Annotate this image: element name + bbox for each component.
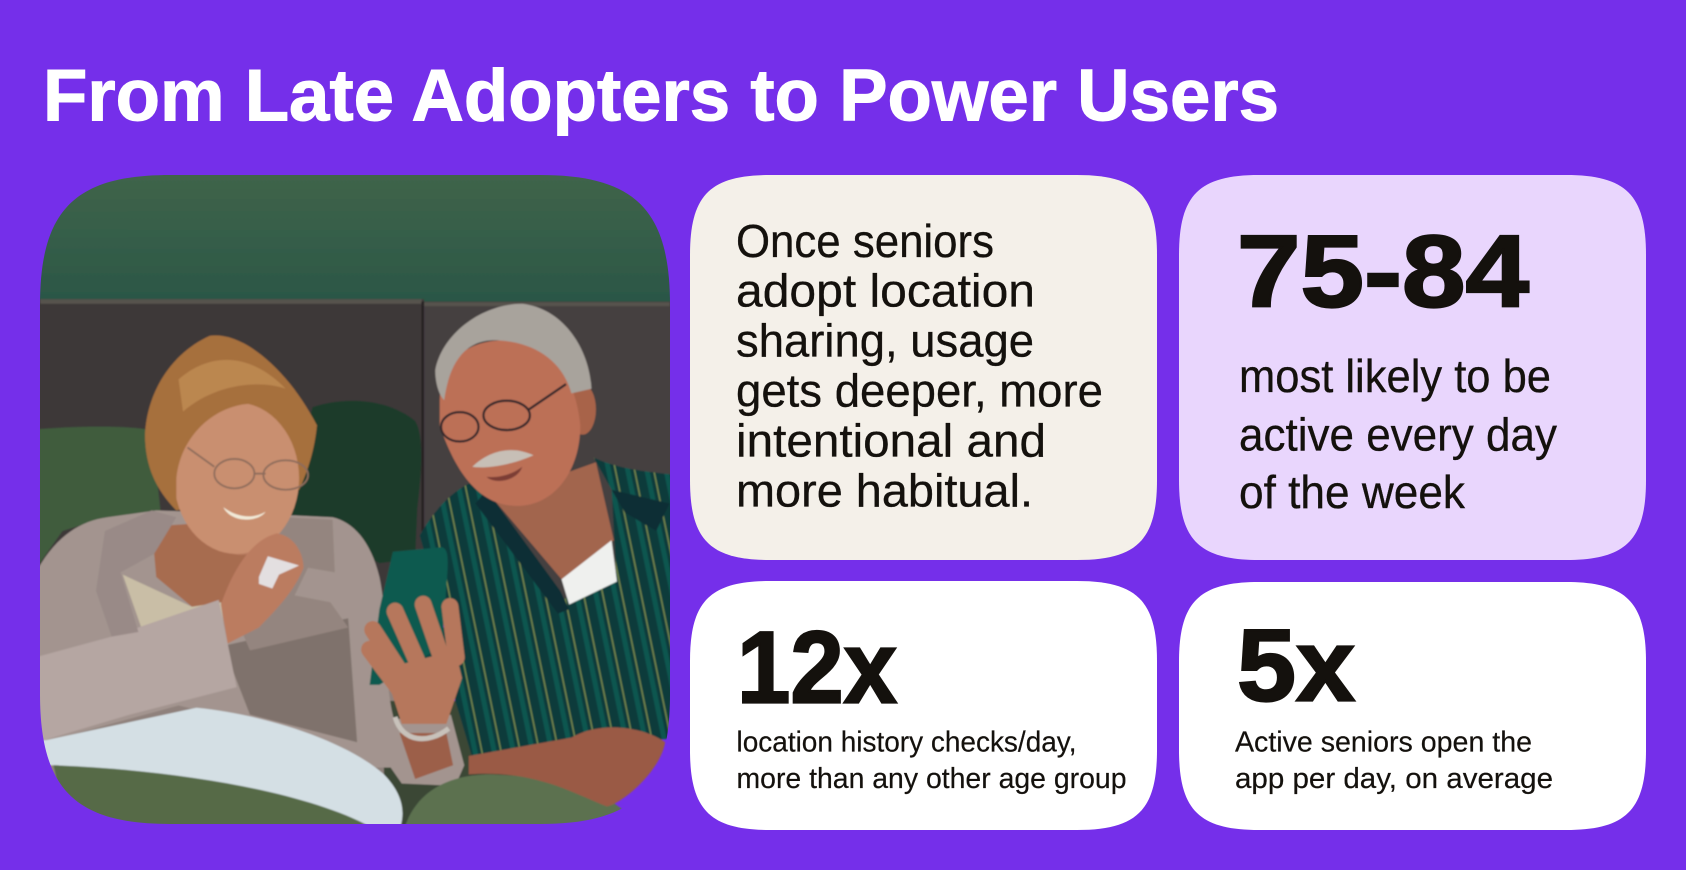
intro text: gets deeper, more <box>736 365 1103 417</box>
panel: 75-84 stat <box>1179 175 1646 560</box>
stat description <box>1235 727 1553 795</box>
stat description: of the week <box>1239 466 1466 518</box>
panel: intro statement <box>690 175 1157 560</box>
intro text: more habitual. <box>736 465 1033 517</box>
stat description <box>736 727 1126 795</box>
stat number: 5x <box>1237 608 1355 722</box>
intro text <box>736 215 1103 517</box>
stat description: Active seniors open the <box>1235 727 1532 759</box>
title: From Late Adopters to Power Users <box>43 56 1279 136</box>
panel: 12x stat <box>690 581 1157 830</box>
stat number: 12x <box>737 610 897 724</box>
intro text: adopt location <box>736 265 1035 317</box>
photo: senior couple looking at a phone on a sofa <box>27 164 683 834</box>
stat description: more than any other age group <box>736 763 1126 795</box>
intro text: Once seniors <box>736 215 994 267</box>
intro text: intentional and <box>736 415 1046 467</box>
stat description <box>1239 350 1557 518</box>
stat description: app per day, on average <box>1235 763 1553 795</box>
stat description: active every day <box>1239 409 1557 461</box>
intro text: sharing, usage <box>736 315 1034 367</box>
panel: 5x stat <box>1179 582 1646 830</box>
stat number: 75-84 <box>1237 214 1529 328</box>
stat description: location history checks/day, <box>736 727 1076 759</box>
stat description: most likely to be <box>1239 350 1551 402</box>
